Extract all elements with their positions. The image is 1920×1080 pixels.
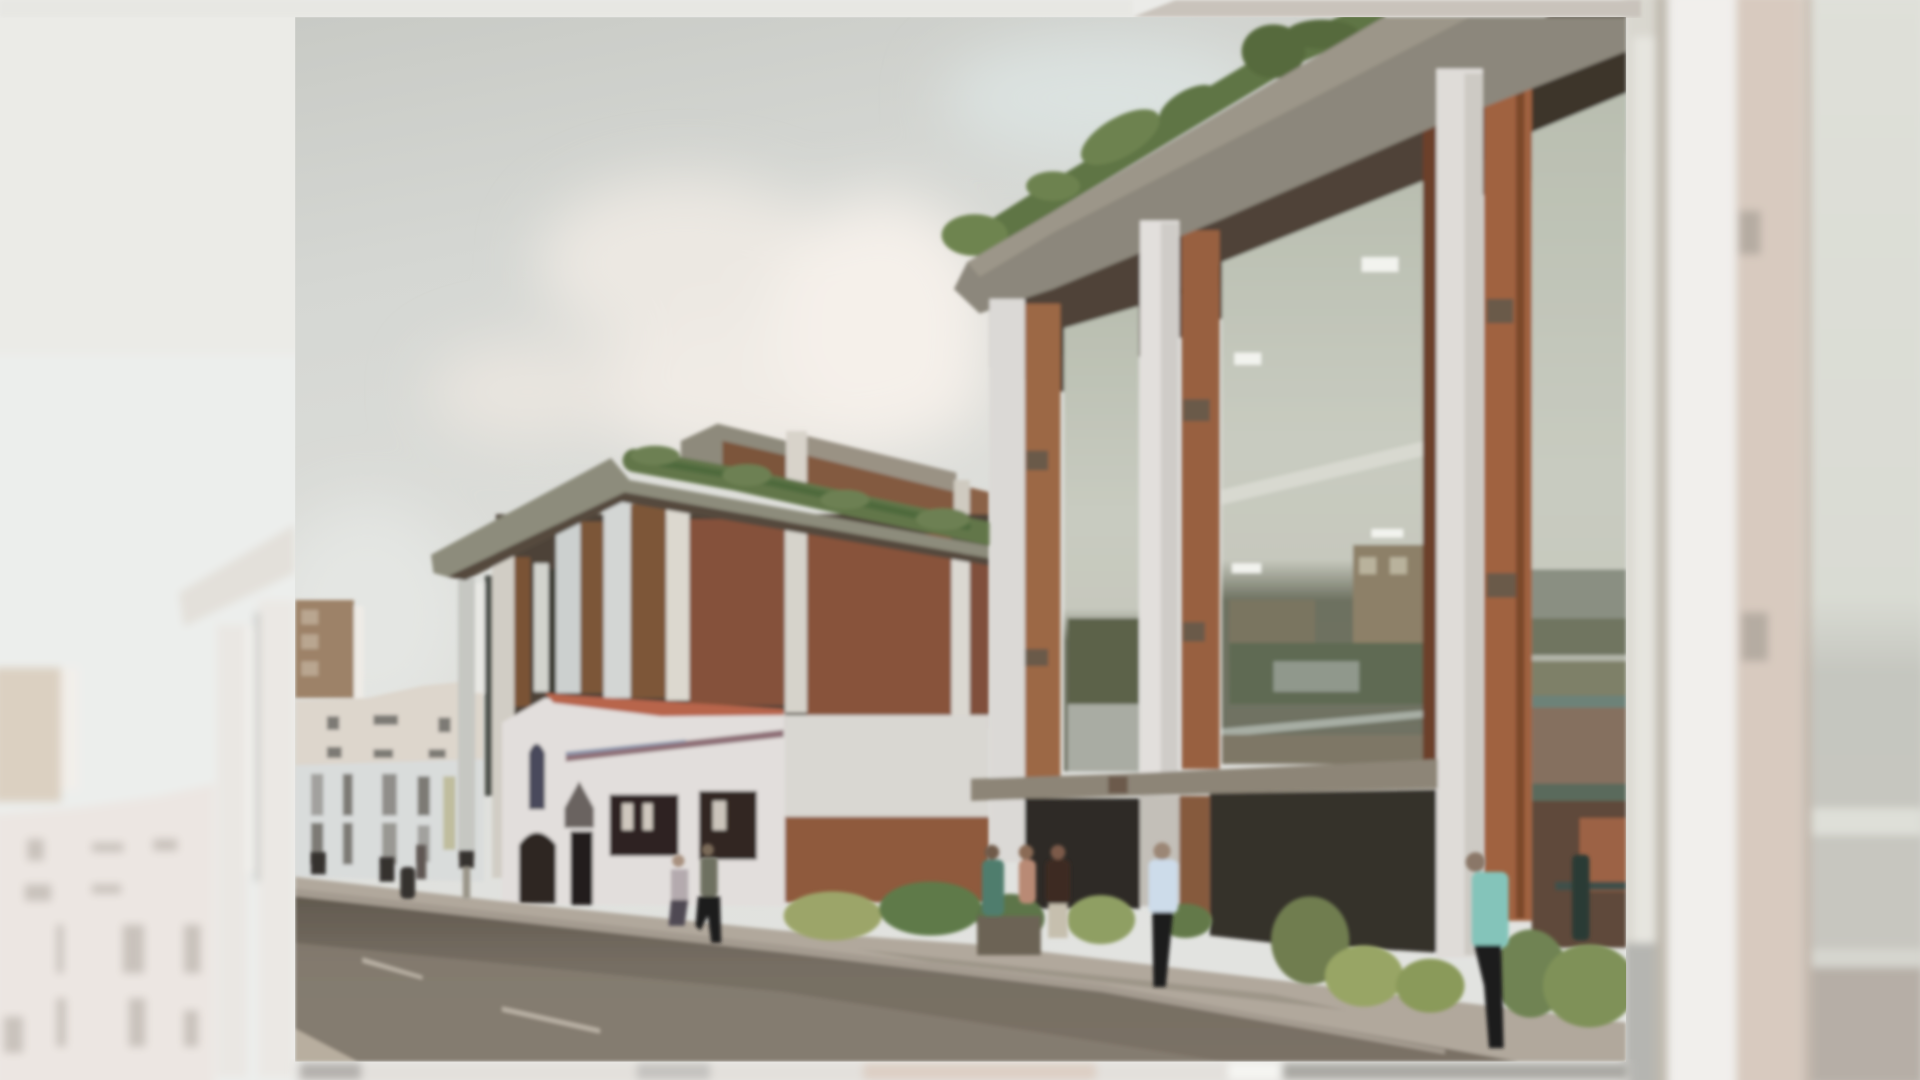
roof slab [431,458,989,577]
interior reflections on glass [1068,257,1626,948]
left building [431,424,989,906]
dark soffit under slab [989,0,1626,392]
background: bottom strip [295,1062,1630,1080]
road and sidewalk [295,877,1626,1062]
right building [942,0,1626,958]
painted stripe [566,730,784,762]
columns [458,497,970,878]
background city buildings [295,600,484,882]
background: top strip [0,0,1641,17]
group at the entrance [982,845,1070,938]
entrance and garage [1025,798,1140,909]
background: blurred left side with pale buildings [0,0,306,1080]
roof foliage [942,17,1371,256]
pedestrians by white house [669,844,721,943]
entrance canopy [971,759,1438,801]
pedestrians [311,842,1589,1048]
pedestrian with mint shirt [1466,852,1509,1048]
pedestrian with blue shirt [1149,842,1178,987]
white house wall [502,698,785,906]
distant pedestrians [311,845,474,899]
windows and doors [519,744,757,905]
glass panes [1061,90,1626,774]
main photograph panel [269,0,1636,1062]
brick panels [513,504,989,727]
wall light fixtures [1024,299,1516,666]
red tile roof [545,693,784,716]
columns [989,299,1025,862]
concrete roof slab [954,17,1626,313]
upper storey [678,422,990,518]
roof foliage [631,446,989,534]
low brick wall [785,817,989,902]
brick piers [1025,86,1532,921]
person behind glass [1572,855,1589,940]
background: blurred right side with column, brick pier and glass [1624,0,1920,1080]
dark facade backing [496,514,989,729]
clouds in the sky [296,32,1230,668]
plants and shrubs [784,882,1636,1027]
